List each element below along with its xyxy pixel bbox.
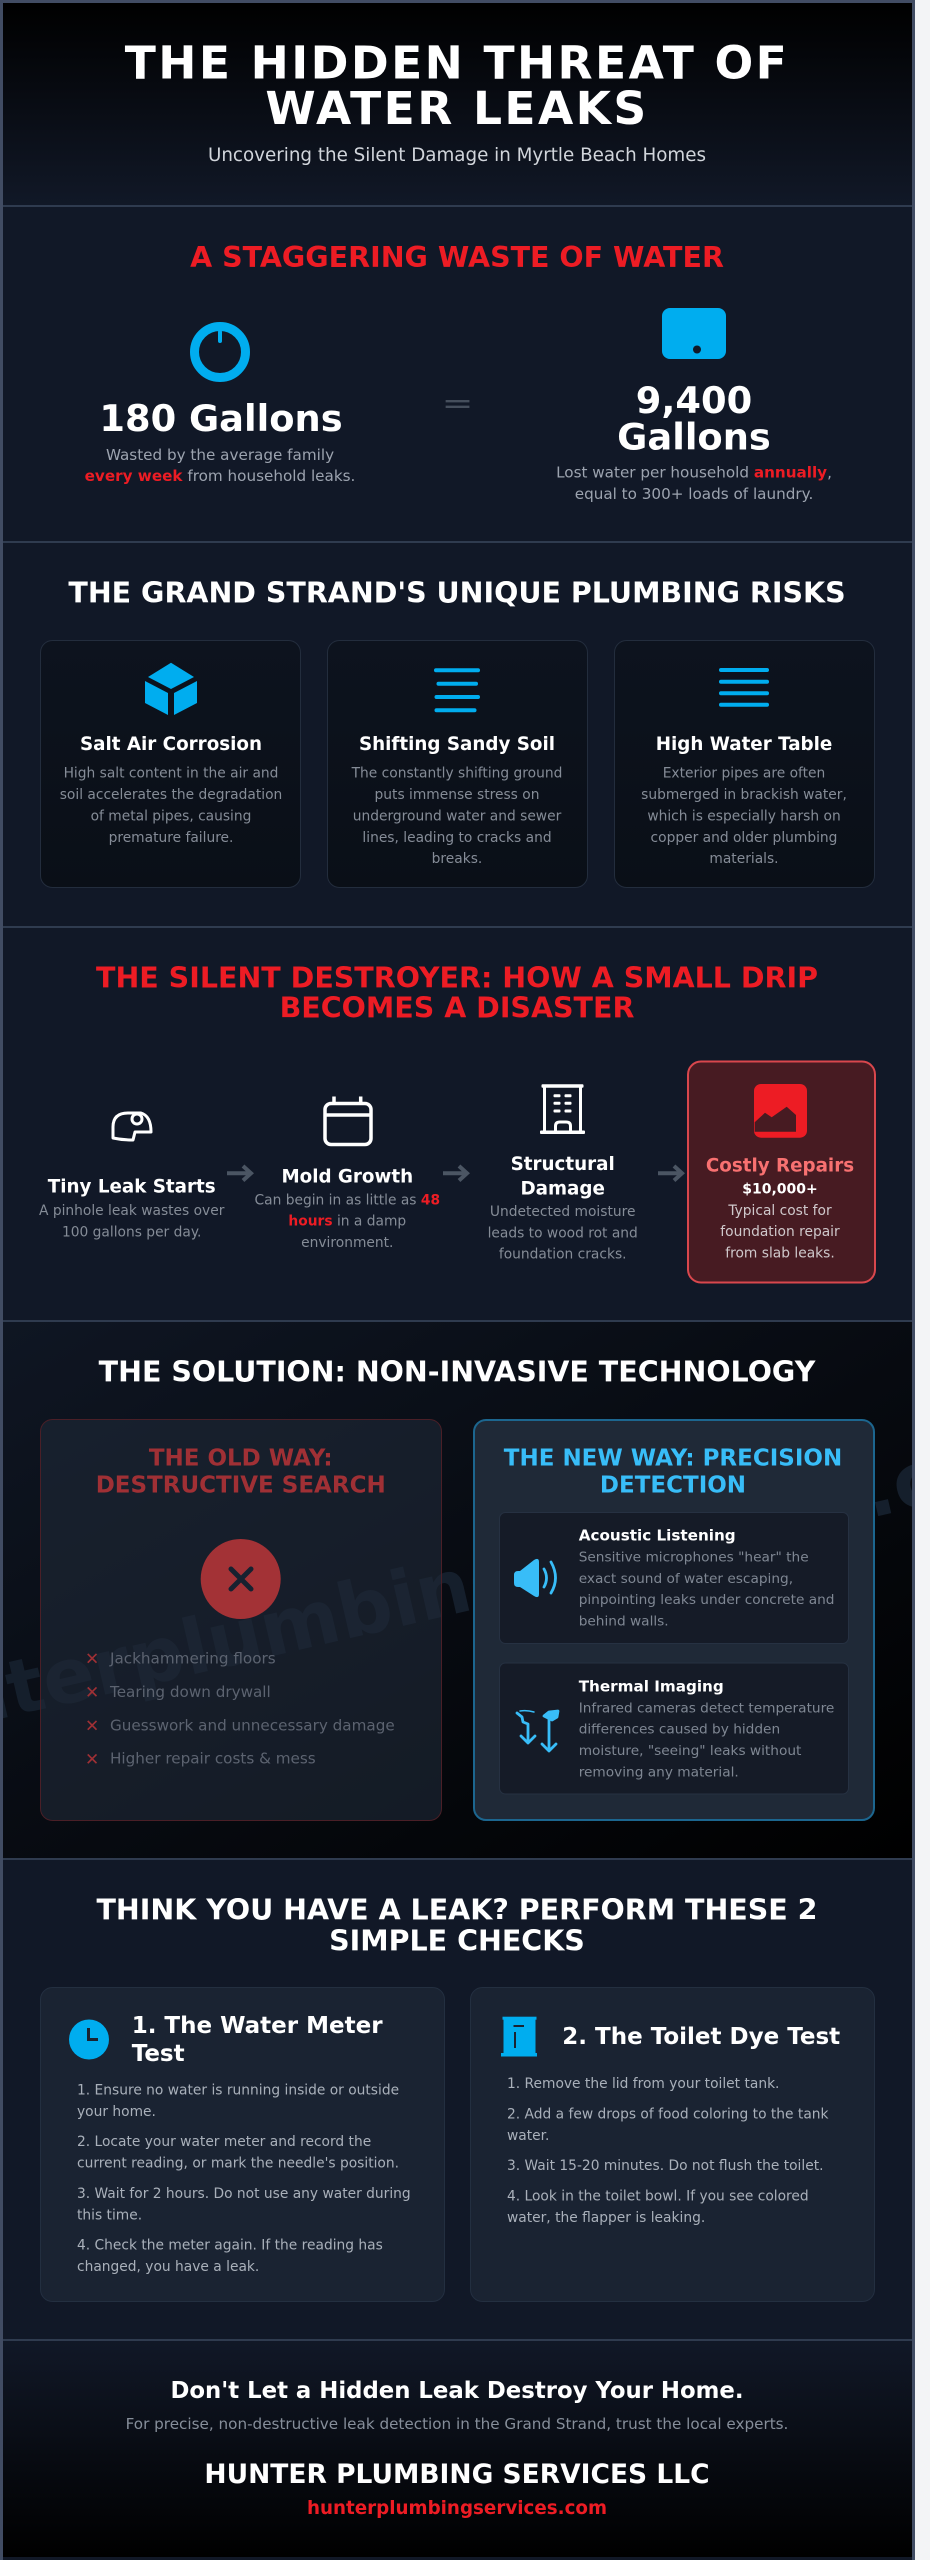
card: costly repairs bbox=[688, 1062, 875, 1282]
list of downsides: ✕ bbox=[85, 1716, 99, 1736]
card: the new way: DETECTION bbox=[600, 1473, 746, 1499]
stat: 180 gallons: every week from household leaks. bbox=[85, 467, 355, 485]
step: mold growth: Can begin in as little as 48 bbox=[254, 1192, 440, 1208]
icon: power gauge bbox=[194, 326, 246, 378]
stat: 180 gallons: Wasted by the average family bbox=[106, 446, 334, 464]
card: salt air corrosion: of metal pipes, causing bbox=[91, 808, 251, 824]
step: tiny leak starts: A pinhole leak wastes over bbox=[39, 1203, 225, 1219]
list of downsides: Jackhammering floors bbox=[109, 1649, 276, 1667]
stat: 9,400 gallons: Lost water per household annually, bbox=[556, 464, 832, 482]
icon: clock bbox=[69, 2020, 109, 2060]
step: tiny leak starts: Tiny Leak Starts bbox=[48, 1177, 216, 1198]
supporting text: For precise, non-destructive leak detection in the Grand Strand, trust the local experts. bbox=[126, 2415, 788, 2433]
title: THE HIDDEN THREAT OF bbox=[125, 36, 789, 90]
card: costly repairs: foundation repair bbox=[720, 1224, 840, 1240]
panel: acoustic listening bbox=[500, 1512, 848, 1644]
card: salt air corrosion: premature failure. bbox=[109, 830, 233, 846]
icon: toilet tank bbox=[501, 2017, 537, 2056]
arrow bbox=[658, 1166, 682, 1180]
panel: thermal imaging: removing any material. bbox=[579, 1764, 739, 1780]
list of downsides: Guesswork and unnecessary damage bbox=[110, 1716, 395, 1734]
step: structural damage: leads to wood rot and bbox=[488, 1225, 638, 1241]
stat: 9,400 gallons: 9,400 bbox=[636, 379, 752, 422]
panel: acoustic listening: behind walls. bbox=[579, 1614, 669, 1630]
card: water meter test: 4. Check the meter again. If the reading has bbox=[77, 2238, 383, 2254]
list of downsides: ✕ bbox=[85, 1683, 99, 1703]
card: high water table: High Water Table bbox=[656, 734, 832, 755]
card: water meter test: your home. bbox=[77, 2104, 156, 2120]
card: toilet dye test: 1. Remove the lid from your toilet tank. bbox=[507, 2076, 779, 2092]
card: toilet dye test: 2. The Toilet Dye Test bbox=[562, 2024, 840, 2050]
icon: x circle bbox=[201, 1539, 281, 1619]
section: footer bbox=[3, 2341, 912, 2557]
heading: THE SOLUTION: NON-INVASIVE TECHNOLOGY bbox=[99, 1356, 816, 1389]
heading: THE SILENT DESTROYER: HOW A SMALL DRIP bbox=[96, 961, 818, 994]
card: shifting sandy soil: breaks. bbox=[432, 851, 482, 867]
card: high water table: copper and older plumbing bbox=[651, 830, 837, 846]
section: header bbox=[3, 3, 912, 205]
panel: acoustic listening: Acoustic Listening bbox=[579, 1527, 736, 1545]
card: water meter test: 2. Locate your water meter and record the bbox=[77, 2134, 371, 2150]
card: toilet dye test: 4. Look in the toilet bowl. If you see colored bbox=[507, 2189, 809, 2205]
card: shifting sandy soil: The constantly shifting ground bbox=[351, 766, 562, 782]
card: salt air corrosion: Salt Air Corrosion bbox=[80, 734, 262, 755]
list of downsides: Higher repair costs & mess bbox=[110, 1750, 316, 1768]
step: mold growth: environment. bbox=[301, 1235, 393, 1251]
card: toilet dye test bbox=[470, 1988, 874, 2302]
company name: HUNTER PLUMBING SERVICES LLC bbox=[204, 2459, 710, 2490]
card: toilet dye test: 2. Add a few drops of food coloring to the tank bbox=[507, 2106, 829, 2122]
icon: thermal sensors bbox=[517, 1711, 558, 1751]
arrow bbox=[227, 1166, 251, 1180]
section: plumbing risks bbox=[3, 543, 912, 926]
card: costly repairs: Typical cost for bbox=[727, 1203, 832, 1219]
icon: strata lines bbox=[434, 668, 480, 712]
card: high water table: which is especially harsh on bbox=[647, 808, 841, 824]
card: toilet dye test: water. bbox=[507, 2128, 549, 2144]
step: structural damage: Damage bbox=[521, 1178, 605, 1199]
card: water meter test: 1. Ensure no water is running inside or outside bbox=[77, 2082, 399, 2098]
card: high water table: materials. bbox=[709, 851, 779, 867]
card: shifting sandy soil: underground water and sewer bbox=[353, 808, 562, 824]
step: tiny leak starts bbox=[39, 1113, 225, 1240]
panel: thermal imaging bbox=[500, 1663, 848, 1794]
card: the new way bbox=[474, 1420, 874, 1820]
card: water meter test: this time. bbox=[77, 2207, 142, 2223]
card: salt air corrosion bbox=[40, 640, 300, 888]
card: water meter test: current reading, or mark the needle's position. bbox=[77, 2156, 399, 2172]
card: costly repairs: $10,000+ bbox=[742, 1181, 818, 1197]
heading: THE GRAND STRAND'S UNIQUE PLUMBING RISKS bbox=[68, 576, 846, 610]
title: WATER LEAKS bbox=[265, 82, 649, 135]
stat: 9,400 gallons bbox=[556, 379, 832, 503]
panel: thermal imaging: differences caused by hidden bbox=[579, 1722, 780, 1738]
website: hunterplumbingservices.com bbox=[307, 2498, 607, 2519]
card: shifting sandy soil: Shifting Sandy Soil bbox=[359, 734, 555, 755]
list of downsides: Tearing down drywall bbox=[109, 1683, 271, 1701]
step: mold growth bbox=[254, 1096, 440, 1251]
step: mold growth: Mold Growth bbox=[281, 1166, 413, 1187]
card: high water table bbox=[614, 640, 874, 888]
card: salt air corrosion: soil accelerates the degradation bbox=[60, 787, 282, 803]
card: high water table: submerged in brackish water, bbox=[641, 787, 847, 803]
panel: acoustic listening: exact sound of water escaping, bbox=[579, 1571, 793, 1587]
stat: 9,400 gallons: equal to 300+ loads of laundry. bbox=[575, 485, 813, 503]
arrow bbox=[443, 1166, 467, 1180]
icon: cube bbox=[145, 663, 197, 715]
card: water meter test bbox=[40, 1988, 444, 2302]
card: the old way bbox=[40, 1420, 442, 1820]
panel: acoustic listening: pinpointing leaks under concrete and bbox=[579, 1592, 834, 1608]
list of downsides: ✕ bbox=[85, 1750, 99, 1770]
card: costly repairs: from slab leaks. bbox=[725, 1245, 835, 1261]
card: toilet dye test: water, the flapper is leaking. bbox=[507, 2210, 705, 2226]
equals sign: = bbox=[442, 387, 473, 420]
step: mold growth: hours in a damp bbox=[288, 1214, 406, 1230]
step: tiny leak starts: 100 gallons per day. bbox=[62, 1224, 201, 1240]
icon: speaker bbox=[514, 1559, 556, 1597]
card: the old way: THE OLD WAY: bbox=[149, 1446, 333, 1472]
list of downsides bbox=[85, 1649, 395, 1770]
card: the old way: DESTRUCTIVE SEARCH bbox=[96, 1473, 386, 1499]
panel: thermal imaging: moisture, "seeing" leaks without bbox=[579, 1743, 802, 1759]
step: structural damage: foundation cracks. bbox=[499, 1246, 627, 1262]
heading: SIMPLE CHECKS bbox=[329, 1925, 585, 1958]
card: water meter test: 1. The Water Meter bbox=[132, 2013, 383, 2039]
stat: 9,400 gallons: Gallons bbox=[617, 416, 771, 458]
card: costly repairs: Costly Repairs bbox=[706, 1156, 854, 1177]
icon: calendar bbox=[325, 1096, 371, 1144]
panel: thermal imaging: Infrared cameras detect temperature bbox=[579, 1700, 834, 1716]
section: simple checks bbox=[3, 1860, 912, 2339]
panel: thermal imaging: Thermal Imaging bbox=[579, 1677, 724, 1695]
heading: THINK YOU HAVE A LEAK? PERFORM THESE 2 bbox=[96, 1893, 818, 1926]
icon: pipe leak bbox=[113, 1113, 151, 1140]
card: water meter test: changed, you have a leak. bbox=[77, 2259, 259, 2275]
step: structural damage bbox=[488, 1084, 638, 1262]
heading: BECOMES A DISASTER bbox=[280, 992, 634, 1025]
icon: tablet bbox=[662, 308, 726, 359]
card: shifting sandy soil: puts immense stress on bbox=[375, 787, 539, 803]
card: shifting sandy soil: lines, leading to cracks and bbox=[362, 830, 552, 846]
icon: damaged image bbox=[754, 1084, 807, 1138]
card: water meter test: 3. Wait for 2 hours. Do not use any water during bbox=[77, 2186, 411, 2202]
icon: building bbox=[540, 1084, 585, 1134]
step: structural damage: Structural bbox=[511, 1154, 615, 1175]
card: high water table: Exterior pipes are often bbox=[663, 766, 825, 782]
icon: water lines bbox=[719, 668, 769, 707]
card: shifting sandy soil bbox=[328, 640, 588, 888]
section: a staggering waste of water bbox=[3, 207, 912, 541]
card: toilet dye test: 3. Wait 15-20 minutes. Do not flush the toilet. bbox=[507, 2158, 824, 2174]
panel: acoustic listening: Sensitive microphones "hear" the bbox=[579, 1550, 809, 1566]
section: the silent destroyer bbox=[3, 928, 912, 1320]
stat: 180 gallons bbox=[85, 397, 355, 485]
subtitle: Uncovering the Silent Damage in Myrtle Beach Homes bbox=[208, 145, 706, 166]
stat: 180 gallons: 180 Gallons bbox=[99, 397, 343, 440]
card: salt air corrosion: High salt content in the air and bbox=[64, 766, 278, 782]
list of downsides: ✕ bbox=[85, 1650, 99, 1670]
card: the new way: THE NEW WAY: PRECISION bbox=[504, 1446, 842, 1472]
call to action: Don't Let a Hidden Leak Destroy Your Home. bbox=[170, 2378, 744, 2404]
step: structural damage: Undetected moisture bbox=[490, 1204, 635, 1220]
card: water meter test: Test bbox=[132, 2041, 185, 2067]
section: the solution bbox=[0, 1322, 930, 1858]
heading: A STAGGERING WASTE OF WATER bbox=[190, 241, 724, 274]
